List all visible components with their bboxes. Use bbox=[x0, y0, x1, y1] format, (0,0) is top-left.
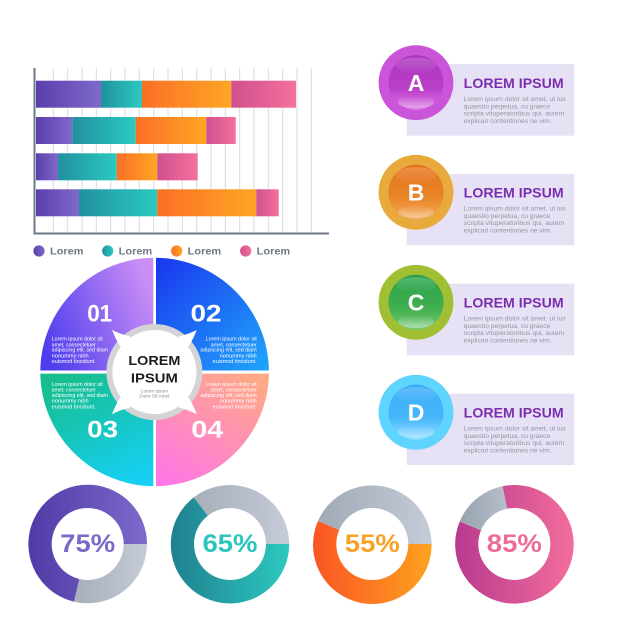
info card A: explicari contentiones ne vim. bbox=[464, 118, 552, 125]
central hub: Dolor Sit Amet bbox=[139, 394, 170, 398]
chart legend: Lorem bbox=[119, 246, 152, 258]
info card A: Lorem ipsum dolor sit amet, ut ius bbox=[464, 96, 566, 103]
info card C: LOREM IPSUM bbox=[464, 295, 564, 310]
info card B: Lorem ipsum dolor sit amet, ut ius bbox=[464, 206, 566, 213]
info card A bbox=[379, 45, 574, 136]
bar row 3 bbox=[36, 153, 198, 180]
bar row 4 bbox=[36, 189, 279, 216]
donut 85% bbox=[455, 485, 574, 604]
badge D bbox=[379, 375, 453, 450]
quadrant 04: euismod tincidunt. bbox=[213, 404, 257, 410]
info card B: quaestio perpetua, cu graece bbox=[464, 213, 551, 220]
quadrant 01: 01 bbox=[87, 301, 112, 328]
quadrant 03: amet, consectetuer bbox=[52, 388, 96, 394]
info card C: scripta vituperatoribus qui, autem bbox=[464, 330, 564, 337]
quadrant 01: adipiscing elit, sed diam bbox=[52, 348, 108, 354]
quadrant 04: 04 bbox=[191, 417, 224, 444]
info card B: scripta vituperatoribus qui, autem bbox=[464, 220, 564, 227]
quadrant 02: Lorem ipsum dolor sit bbox=[206, 337, 257, 343]
donut 65% bbox=[171, 485, 289, 603]
quadrant 01: amet, consectetuer bbox=[52, 342, 96, 348]
quadrant 01: Lorem ipsum dolor sit bbox=[52, 337, 103, 343]
quadrant 04: nonummy nibh bbox=[220, 399, 257, 405]
bar row 1 bbox=[36, 81, 296, 108]
info card B: LOREM IPSUM bbox=[464, 185, 564, 200]
info card C bbox=[379, 265, 574, 355]
badge B: B bbox=[408, 180, 424, 206]
info card C: quaestio perpetua, cu graece bbox=[464, 323, 551, 330]
badge D: D bbox=[408, 400, 424, 426]
donut 55%: 55% bbox=[345, 530, 400, 558]
chart legend bbox=[33, 245, 290, 258]
bar chart bbox=[34, 68, 329, 234]
quadrant 02: adipiscing elit, sed diam bbox=[200, 348, 257, 354]
info card D: quaestio perpetua, cu graece bbox=[464, 433, 551, 440]
donut 65%: 65% bbox=[202, 530, 258, 558]
info card B: explicari contentiones ne vim. bbox=[464, 228, 552, 235]
quadrant 02: amet, consectetuer bbox=[211, 342, 257, 348]
info card C: explicari contentiones ne vim. bbox=[464, 338, 552, 345]
info card D: Lorem ipsum dolor sit amet, ut ius bbox=[464, 426, 566, 433]
quadrant 04 bbox=[156, 374, 269, 486]
quadrant 03: euismod tincidunt. bbox=[52, 404, 96, 410]
quadrant 02: nonummy nibh bbox=[220, 353, 257, 359]
info card D: explicari contentiones ne vim. bbox=[464, 448, 552, 455]
quadrant 01: nonummy nibh bbox=[52, 353, 89, 359]
chart legend: Lorem bbox=[188, 246, 221, 258]
chart legend: Lorem bbox=[257, 246, 290, 258]
donut 85%: 85% bbox=[487, 530, 542, 558]
donut 75%: 75% bbox=[60, 530, 115, 558]
quadrant 03 bbox=[40, 374, 153, 486]
central hub: LOREM bbox=[128, 353, 180, 368]
info card B bbox=[379, 155, 574, 245]
info card A: quaestio perpetua, cu graece bbox=[464, 103, 551, 110]
info card D: scripta vituperatoribus qui, autem bbox=[464, 440, 564, 447]
badge A bbox=[379, 45, 453, 120]
quadrant 04: amet, consectetuer bbox=[211, 388, 257, 394]
central hub: IPSUM bbox=[131, 371, 178, 386]
quadrant 03: Lorem ipsum dolor sit bbox=[52, 382, 103, 388]
quadrant 02 bbox=[156, 258, 269, 370]
quadrant 03: 03 bbox=[87, 417, 118, 444]
info card A: LOREM IPSUM bbox=[464, 76, 564, 91]
quadrant 02: 02 bbox=[190, 301, 222, 328]
badge C: C bbox=[408, 290, 424, 316]
segmented circle diagram bbox=[40, 258, 269, 486]
donut 75% bbox=[28, 485, 147, 603]
chart legend: Lorem bbox=[50, 246, 84, 258]
badge A: A bbox=[408, 70, 424, 96]
badge B bbox=[379, 155, 453, 230]
info card D: LOREM IPSUM bbox=[464, 405, 564, 420]
info card C: Lorem ipsum dolor sit amet, ut ius bbox=[464, 316, 566, 323]
quadrant 02: euismod tincidunt. bbox=[213, 359, 257, 365]
quadrant 03: adipiscing elit, sed diam bbox=[52, 393, 108, 399]
quadrant 03: nonummy nibh bbox=[52, 399, 89, 405]
info card A: scripta vituperatoribus qui, autem bbox=[464, 111, 564, 118]
quadrant 01 bbox=[40, 258, 153, 370]
quadrant 01: euismod tincidunt. bbox=[52, 359, 96, 365]
quadrant 04: adipiscing elit, sed diam bbox=[200, 393, 257, 399]
central hub bbox=[106, 324, 202, 420]
quadrant 04: Lorem ipsum dolor sit bbox=[206, 382, 257, 388]
central hub: Lorem Ipsum bbox=[141, 389, 168, 394]
bar row 2 bbox=[36, 117, 236, 144]
donut 55% bbox=[313, 485, 432, 604]
badge C bbox=[379, 265, 453, 340]
info card D bbox=[379, 375, 574, 465]
